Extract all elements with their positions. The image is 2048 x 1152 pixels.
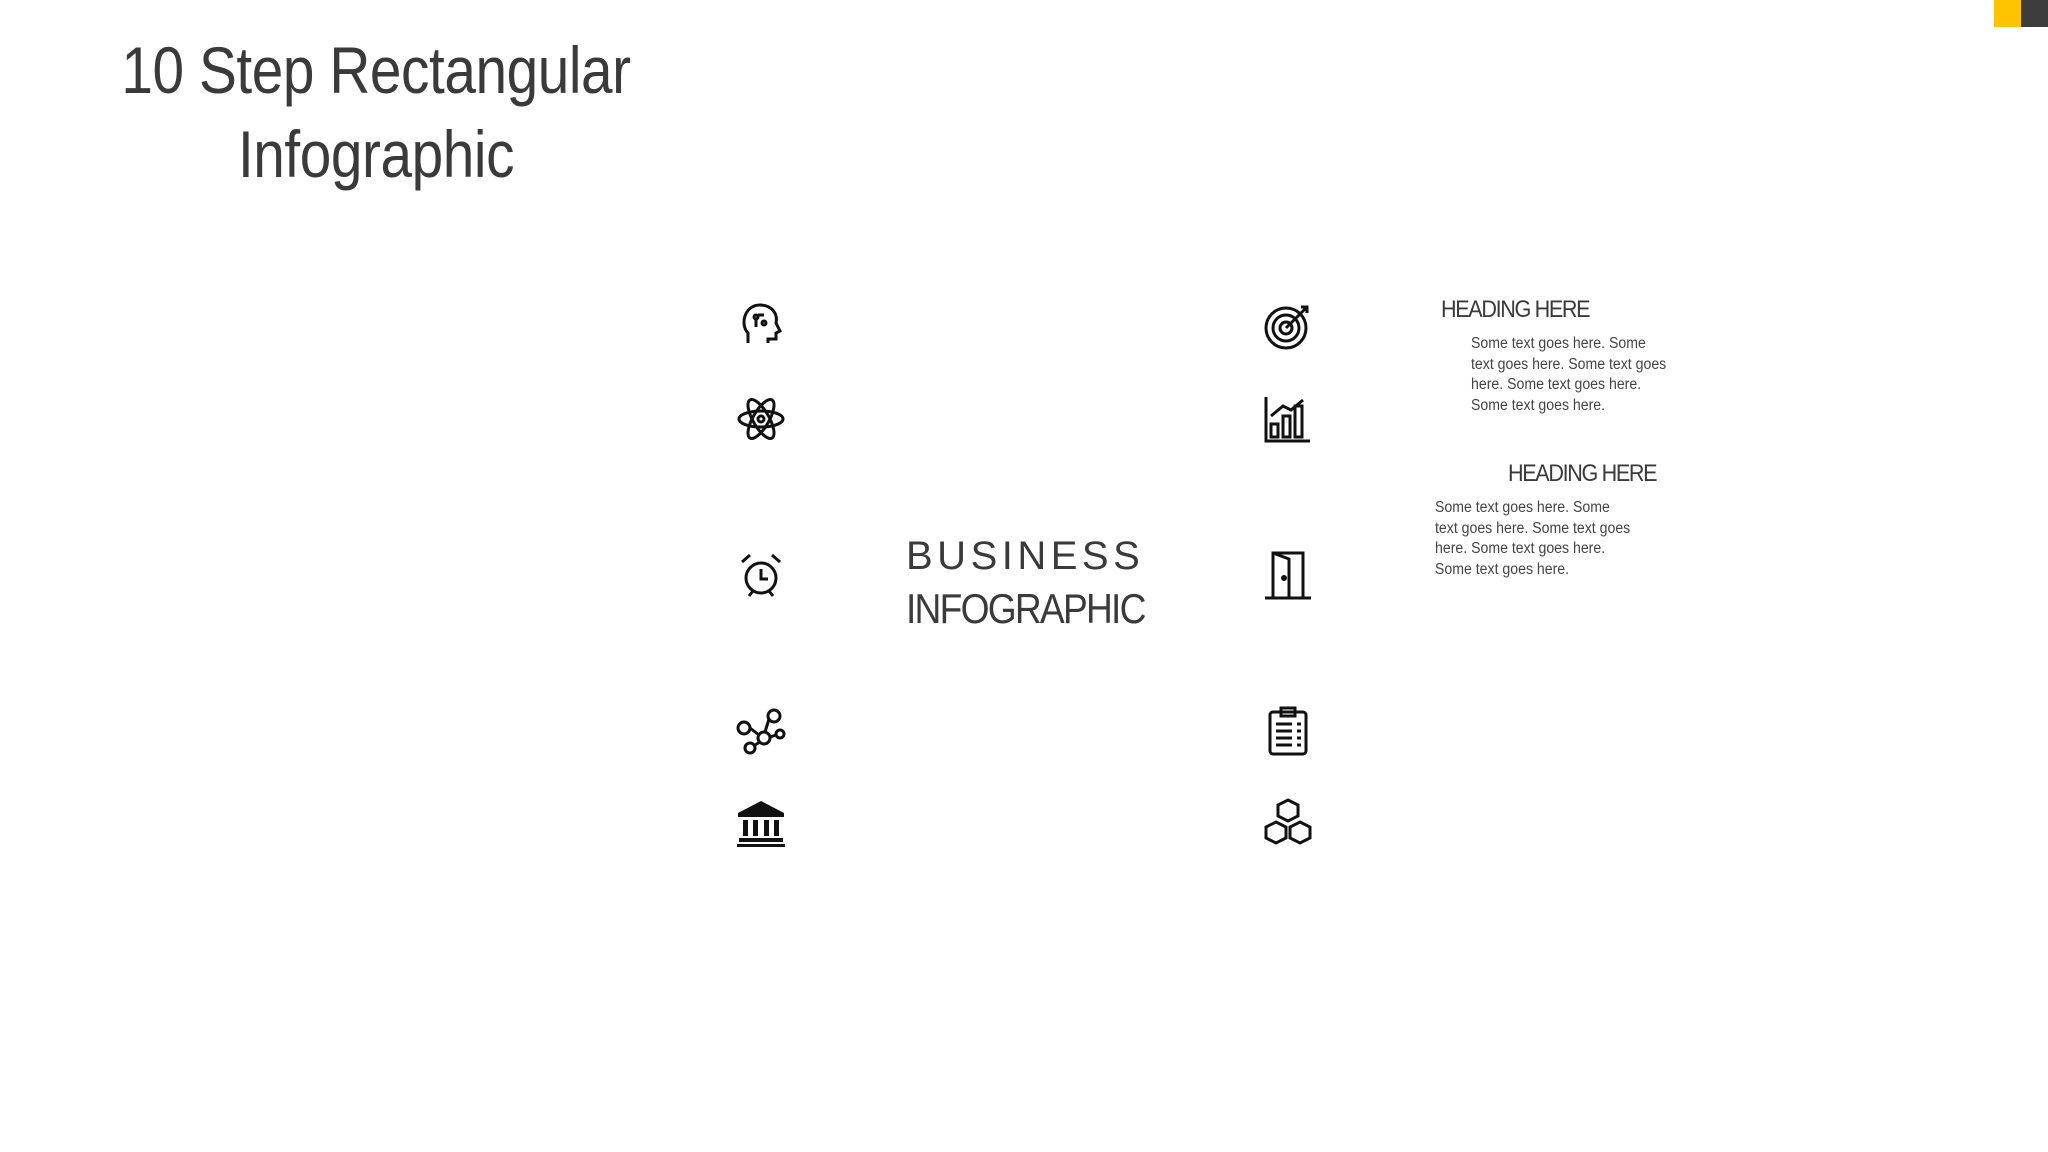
text block 1: Some text goes here. Some bbox=[1471, 335, 1646, 352]
icon: door bbox=[1265, 552, 1311, 600]
text block 2: HEADING HERE bbox=[1508, 460, 1656, 487]
icon: atom bbox=[738, 398, 784, 440]
text block 1: text goes here. Some text goes bbox=[1471, 356, 1666, 372]
text block 2: Some text goes here. Some bbox=[1435, 499, 1610, 516]
icon: bar chart bbox=[1264, 397, 1310, 442]
icon: boxes bbox=[1264, 798, 1312, 845]
text block 1: Some text goes here. bbox=[1471, 396, 1605, 414]
icon: clipboard bbox=[1268, 706, 1308, 756]
center label bbox=[906, 534, 1145, 632]
icon: alarm clock bbox=[741, 554, 781, 597]
icon: network bbox=[736, 708, 786, 754]
title: Infographic bbox=[238, 117, 514, 191]
text block 1 bbox=[1441, 296, 1666, 414]
title bbox=[121, 33, 631, 191]
text block 2 bbox=[1435, 460, 1657, 578]
text block 1: HEADING HERE bbox=[1441, 296, 1589, 323]
center label: BUSINESS bbox=[906, 534, 1144, 578]
text block 2: Some text goes here. bbox=[1435, 560, 1569, 578]
icon: bank bbox=[737, 801, 785, 847]
icon: target bbox=[1264, 306, 1308, 350]
icon: head bbox=[742, 304, 782, 343]
corner accent bbox=[1994, 0, 2048, 27]
text block 2: here. Some text goes here. bbox=[1435, 540, 1605, 557]
center label: INFOGRAPHIC bbox=[906, 585, 1145, 632]
title: 10 Step Rectangular bbox=[121, 33, 631, 107]
text block 1: here. Some text goes here. bbox=[1471, 376, 1641, 393]
text block 2: text goes here. Some text goes bbox=[1435, 520, 1630, 536]
